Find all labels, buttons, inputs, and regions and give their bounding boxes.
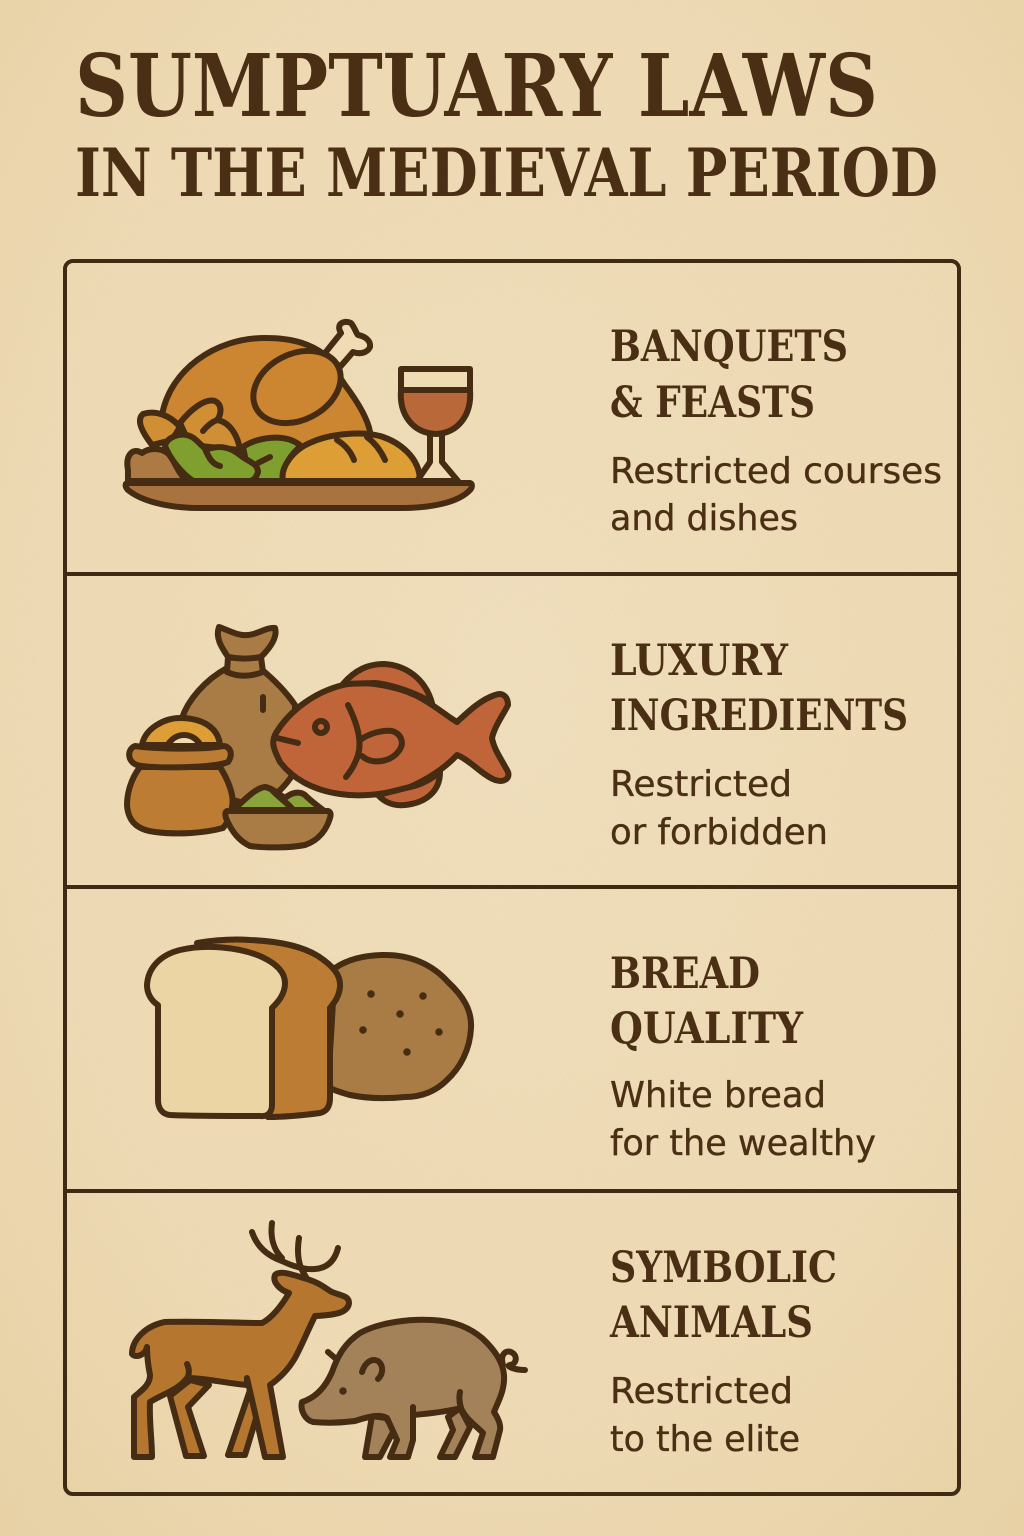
text: white bread for the wealthy: White bread [610, 1075, 826, 1116]
heading: symbolic animals: SYMBOLIC [610, 1243, 837, 1293]
heading: luxury ingredients [610, 636, 908, 741]
heading: banquets and feasts: & FEASTS [610, 378, 815, 428]
icon: spice sacks, fish and bowl [127, 627, 508, 847]
heading: bread quality: QUALITY [610, 1004, 804, 1054]
text: restricted or forbidden: Restricted [610, 764, 792, 805]
panel: banquets and feasts [126, 322, 942, 539]
heading: bread quality [610, 949, 804, 1054]
heading: banquets and feasts: BANQUETS [610, 322, 848, 372]
text: restricted courses and dishes: Restricted courses [610, 451, 942, 492]
panel: luxury ingredients [127, 627, 908, 853]
text: restricted courses and dishes: and dishes [610, 498, 798, 539]
heading: luxury ingredients: LUXURY [610, 636, 789, 686]
icon: white loaf and brown round [147, 940, 471, 1117]
panel: bread quality [147, 940, 876, 1164]
text: restricted courses and dishes [610, 451, 942, 539]
text: restricted to the elite: to the elite [610, 1419, 800, 1460]
title: SUMPTUARY LAWS [75, 36, 878, 137]
panel: symbolic animals [132, 1223, 837, 1460]
text: restricted or forbidden [610, 764, 828, 853]
heading: luxury ingredients: INGREDIENTS [610, 691, 908, 741]
title [75, 36, 938, 212]
heading: symbolic animals [609, 1243, 837, 1348]
heading: bread quality: BREAD [610, 949, 760, 999]
heading: banquets and feasts [610, 322, 848, 428]
text: white bread for the wealthy: for the wealthy [610, 1123, 876, 1164]
text: restricted to the elite [610, 1371, 800, 1460]
icon: stag and boar [132, 1223, 525, 1457]
text: restricted or forbidden: or forbidden [610, 812, 828, 853]
icon: roast feast with wine [126, 322, 472, 508]
text: restricted to the elite: Restricted [610, 1371, 793, 1412]
heading: symbolic animals: ANIMALS [609, 1298, 813, 1348]
text: white bread for the wealthy [610, 1075, 876, 1164]
panel frame [65, 261, 959, 1494]
